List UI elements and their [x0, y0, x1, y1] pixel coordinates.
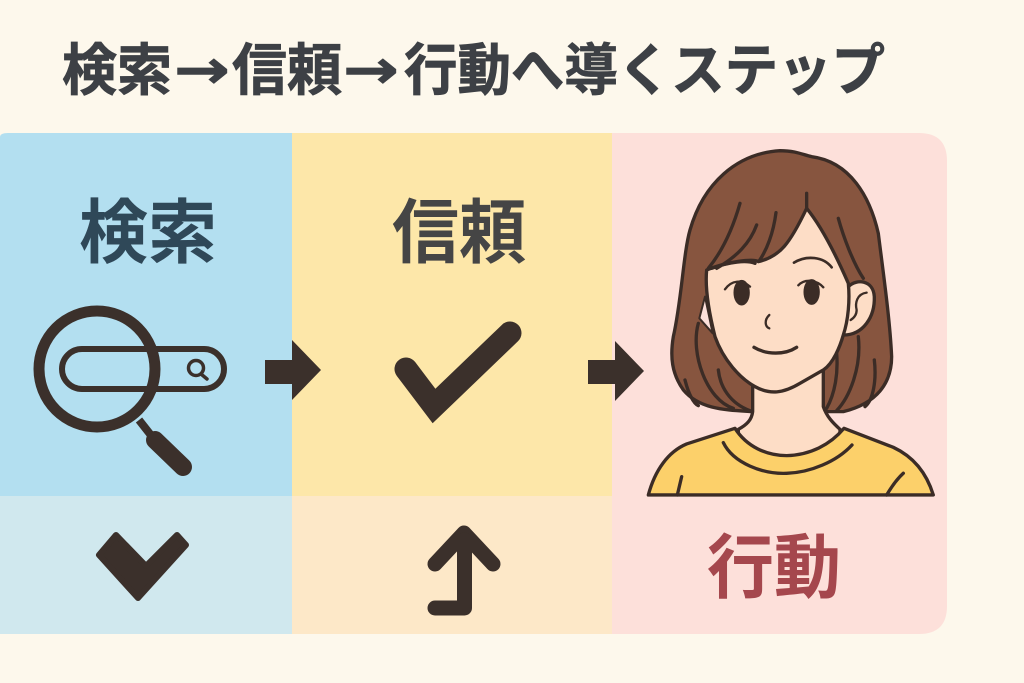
cheek gap: [699, 297, 713, 333]
sweater: [648, 428, 933, 495]
panel: trust: [292, 133, 612, 634]
hair strands: [685, 193, 875, 411]
face: [706, 208, 849, 392]
icon: up arrow with foot: [435, 533, 493, 608]
ear: [843, 282, 874, 335]
nose: [766, 315, 769, 328]
panel: action: [612, 133, 947, 634]
title: 信頼: [232, 39, 342, 102]
title: [62, 38, 885, 102]
sweater details: [677, 443, 903, 495]
mouth: [754, 347, 797, 353]
eyes: [725, 280, 823, 304]
illustration: woman: [648, 151, 933, 495]
neck: [738, 370, 840, 460]
icon: bottom check: [99, 535, 186, 598]
arrow: trust to action: [588, 341, 644, 401]
title: 検索: [62, 39, 172, 102]
panel: search: [0, 133, 292, 634]
icon: magnifying glass over search bar: [39, 311, 224, 467]
eyebrows: [794, 258, 832, 267]
icon: check mark: [406, 333, 510, 406]
hair: [672, 151, 892, 412]
ear detail: [851, 293, 867, 320]
heading: trust: 信頼: [392, 194, 526, 272]
title: →: [174, 38, 230, 101]
title: 行動へ導くステップ: [404, 39, 885, 102]
heading: action: 行動: [707, 529, 841, 607]
arrow: search to trust: [265, 340, 321, 400]
heading: search: 検索: [79, 194, 217, 272]
title: →: [343, 38, 399, 101]
